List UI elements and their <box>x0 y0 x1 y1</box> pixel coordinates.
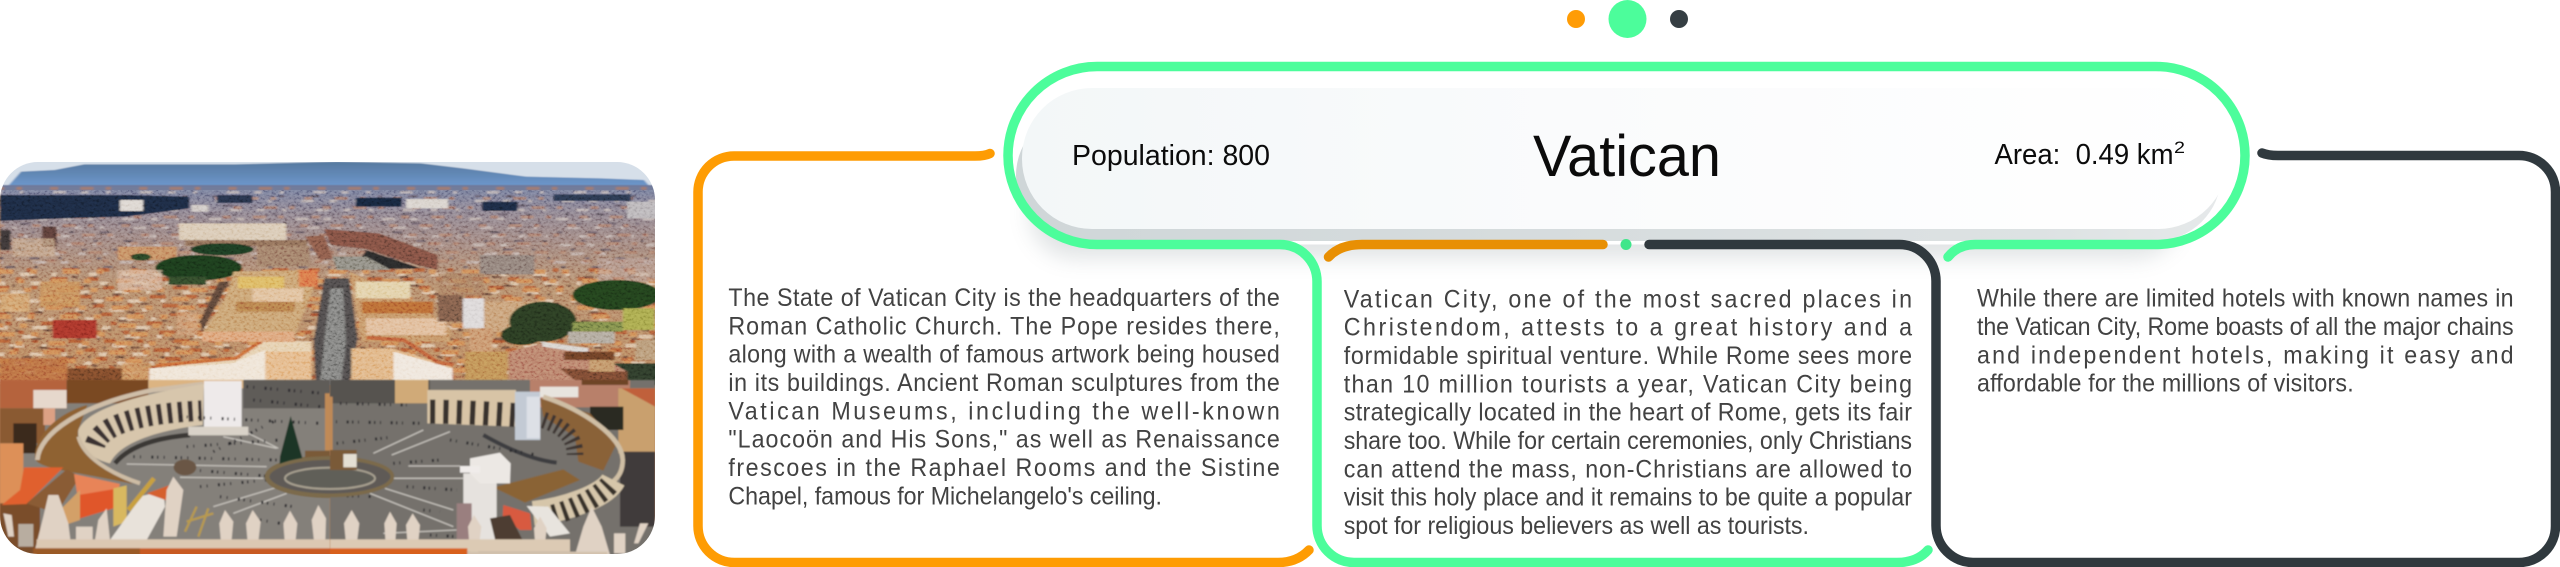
text block: left card: in its buildings. Ancient Roman sculptures from the <box>728 369 1280 397</box>
text block: middle card <box>1344 286 1913 540</box>
title pill panel <box>1008 66 2245 244</box>
photo: statues right <box>344 507 648 555</box>
text block: right card: and independent hotels, making it easy and <box>1977 342 2514 370</box>
title: Vatican <box>1533 124 1721 189</box>
text block: right card: While there are limited hotels with known names in <box>1977 285 2514 313</box>
text block: left card: Chapel, famous for Michelangelo's ceiling. <box>728 483 1162 511</box>
text block: middle card: than 10 million tourists a year, Vatican City being <box>1344 371 1912 399</box>
text block: left card <box>728 284 1280 511</box>
photo: far rooftops mosaic <box>0 188 660 267</box>
orange card outline: left text box <box>698 154 1309 562</box>
text block: middle card: strategically located in the heart of Rome, gets its fair <box>1344 399 1912 427</box>
photo: near rooftops mosaic <box>0 270 660 382</box>
text block: right card <box>1977 285 2514 398</box>
green outline: title pill and middle card <box>1008 66 2245 562</box>
population label: Population: 800 <box>1072 140 1270 172</box>
photo: right city patches <box>438 280 661 385</box>
text block: middle card: Christendom, attests to a great history and a <box>1344 314 1913 342</box>
decorative dots row <box>1567 0 1688 38</box>
photo: central blocks and street <box>149 270 454 385</box>
text block: middle card: spot for religious believers as well as tourists. <box>1344 512 1809 540</box>
area label: 2 <box>2174 138 2185 157</box>
text block: left card: frescoes in the Raphael Rooms and the Sistine <box>728 454 1280 482</box>
text block: middle card: formidable spiritual venture. While Rome sees more <box>1344 342 1912 370</box>
photo: left city patches <box>0 270 229 385</box>
text block: left card: "Laocoön and His Sons," as well as Renaissance <box>728 426 1280 454</box>
photo: left colonnade and foreground <box>0 379 330 554</box>
text block: left card: Vatican Museums, including the well-known <box>728 398 1280 426</box>
orange top segment of middle card <box>1328 244 1603 257</box>
text block: middle card: can attend the mass, non-Christians are allowed to <box>1344 456 1912 484</box>
photo: statues left <box>3 477 326 550</box>
area label: Area: 0.49 km <box>1994 139 2174 171</box>
photo: city texture <box>0 190 655 385</box>
text block: right card: affordable for the millions of visitors. <box>1977 370 2354 398</box>
photo upper part: skyline and city <box>0 155 661 385</box>
text block: left card: along with a wealth of famous artwork being housed <box>728 341 1280 369</box>
photo: right colonnade and foreground <box>268 380 655 560</box>
text block: middle card: share too. While for certain ceremonies, only Christians <box>1344 427 1912 455</box>
dark card outline: right text box <box>1649 153 2556 562</box>
text block: left card: Roman Catholic Church. The Pope resides there, <box>728 313 1280 341</box>
text block: middle card: Vatican City, one of the most sacred places in <box>1344 286 1912 314</box>
text block: middle card: visit this holy place and it remains to be quite a popular <box>1344 484 1912 512</box>
photo: trees and river by the castle <box>131 229 438 285</box>
text block: right card: the Vatican City, Rome boasts of all the major chains <box>1977 313 2514 341</box>
photo: St Peter's Square aerial view <box>0 155 661 560</box>
soft shadow under title pill <box>1030 170 2180 258</box>
text block: left card: The State of Vatican City is the headquarters of the <box>728 284 1280 312</box>
green dot between segments <box>1620 239 1632 250</box>
